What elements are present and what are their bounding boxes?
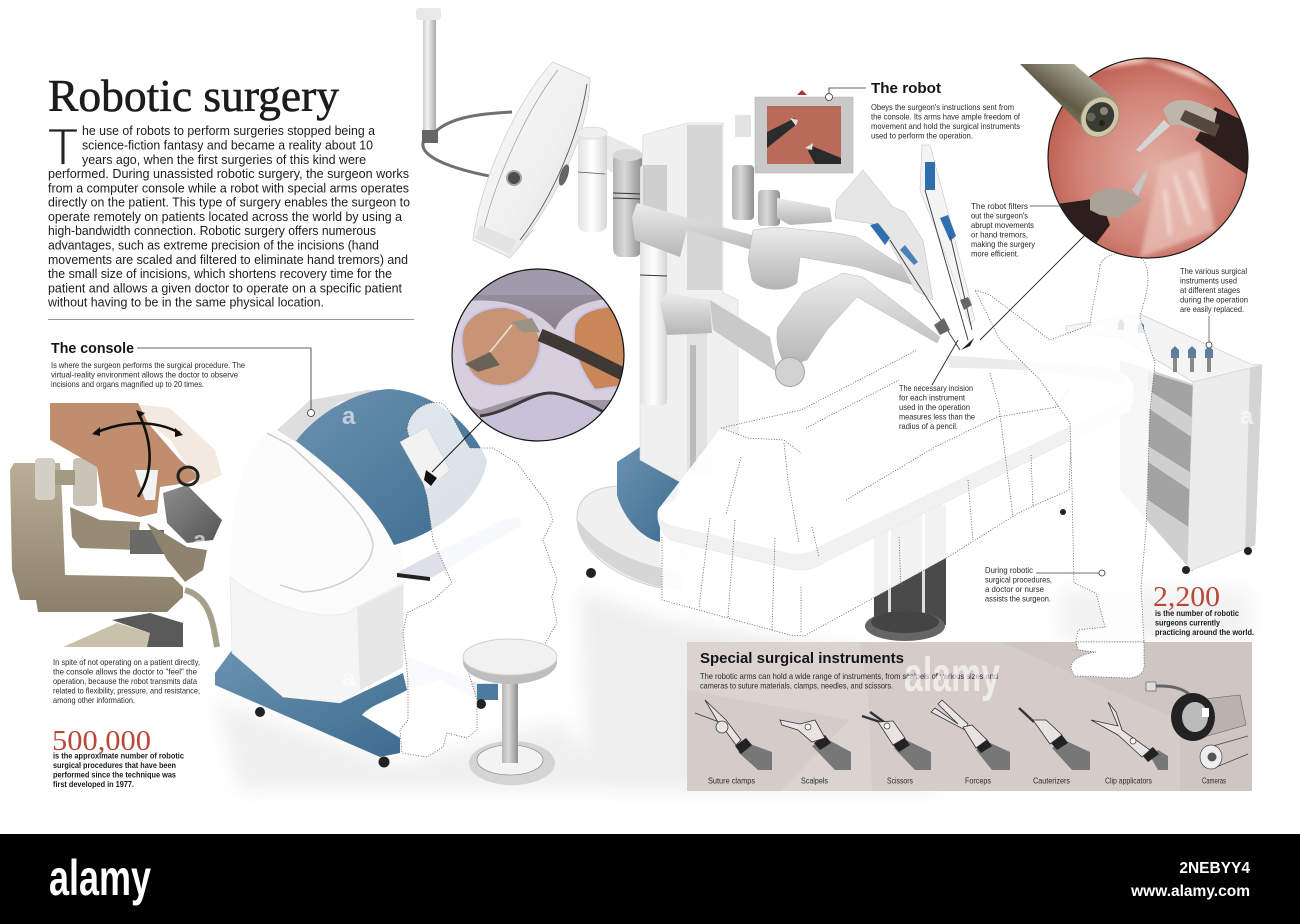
instrument captions: Cauterizers <box>1033 776 1070 786</box>
intro paragraph: movements are scaled and filtered to eliminate hand tremors) and <box>48 253 408 267</box>
coil wraps <box>35 458 55 500</box>
intro paragraph: operate remotely on patients located across the world by using a <box>48 210 402 224</box>
instrument: suture clamps <box>695 700 772 770</box>
tower base <box>577 486 700 590</box>
cart instruments <box>1118 319 1213 358</box>
instrument captions: Scissors <box>887 776 913 786</box>
hand controller <box>10 403 222 647</box>
stat: 2,200 <box>1153 581 1254 637</box>
note: assistant <box>985 565 1105 604</box>
note: tremor filtering: out the surgeon's <box>971 210 1028 220</box>
floor reflections <box>215 590 1250 790</box>
instruments in lens <box>512 318 540 332</box>
instrument: scissors <box>862 712 931 770</box>
watermark <box>193 403 1254 702</box>
note: tremor filtering: or hand tremors, <box>971 230 1028 240</box>
panel description: cameras to suture materials, clamps, needles, and scissors. <box>700 680 893 690</box>
intro paragraph: the small size of incisions, which shortens recovery time for the <box>48 267 392 281</box>
instrument captions: Scalpels <box>801 776 828 786</box>
note: tremor filtering: abrupt movements <box>971 220 1034 230</box>
endoscope tube <box>1020 64 1116 128</box>
note: instruments replaced <box>1180 266 1250 348</box>
footer band <box>0 834 1300 924</box>
panel heading: Special surgical instruments <box>700 650 904 667</box>
stat: 500,000: 500,000 <box>52 725 151 757</box>
leader <box>137 348 311 410</box>
intro text block <box>47 118 414 310</box>
stat: 500,000: is the approximate number of robotic <box>53 750 184 760</box>
grip cylinder <box>163 485 222 543</box>
note: instruments replaced: at different stages <box>1180 285 1240 295</box>
instrument captions: Suture clamps <box>708 776 755 786</box>
controller stand <box>63 623 150 647</box>
cart body <box>1120 360 1193 572</box>
instrument holders <box>920 145 975 325</box>
instrument captions <box>708 776 1226 786</box>
leader <box>829 88 866 93</box>
watermark: a <box>1240 403 1254 430</box>
note: tremor filtering <box>971 201 1062 258</box>
watermark: a <box>1090 524 1104 551</box>
console note: among other information. <box>53 695 135 705</box>
mattress top <box>658 360 1133 554</box>
instrument: forceps <box>931 700 1010 770</box>
console description: virtual-reality environment allows the doctor to observe <box>51 370 238 380</box>
console note: related to flexibility, pressure, and resistance, <box>53 686 200 696</box>
lamp ceiling post <box>416 8 441 132</box>
console eyepiece <box>400 427 450 490</box>
motion arrows <box>95 423 180 433</box>
robot heading <box>826 80 941 100</box>
console blue hood <box>296 389 487 545</box>
watermark: a <box>342 403 356 430</box>
intro paragraph: advantages, such as extreme precision of the incisions (hand <box>48 238 379 252</box>
head-rest shade <box>945 355 1125 385</box>
lower arm <box>660 293 712 335</box>
assistant silhouette <box>975 253 1155 642</box>
stat: 2,200: is the number of robotic <box>1155 608 1239 618</box>
note: incision: measures less than the <box>899 412 975 422</box>
inset: console binocular view <box>432 265 630 472</box>
tower blue collar <box>617 445 685 542</box>
drop cap: T <box>47 118 79 177</box>
leader <box>1036 572 1099 574</box>
operating table <box>658 350 1134 641</box>
instrument: clip applicators <box>1091 702 1168 770</box>
console heading <box>51 340 314 416</box>
lamp connector <box>507 171 521 185</box>
note: instruments replaced: instruments used <box>1180 276 1237 286</box>
note: incision: for each instrument <box>899 392 966 402</box>
assistant foot over panel <box>1071 642 1144 678</box>
note: tremor filtering: making the surgery <box>971 239 1036 249</box>
instrument: cauterizers <box>1019 708 1090 770</box>
controller frame <box>10 463 183 612</box>
instrument: cameras <box>1146 682 1248 769</box>
note: instruments replaced: are easily replaced. <box>1180 304 1244 314</box>
watermark: alamy <box>904 649 1000 702</box>
console base <box>215 650 407 757</box>
cable <box>185 590 217 647</box>
lamp head <box>473 62 590 258</box>
robot tower <box>577 115 975 590</box>
mattress side <box>658 375 1134 570</box>
console <box>215 389 522 768</box>
robot description: the console. Its arms have ample freedom of <box>871 112 1021 122</box>
stat: 500,000: first developed in 1977. <box>53 779 134 789</box>
callout line to incision <box>932 232 1088 385</box>
intro paragraph: performed. During unassisted robotic surgery, the surgeon works <box>48 167 409 181</box>
intro paragraph: without having to be in the same physical location. <box>47 296 324 310</box>
intro paragraph: from a computer console while a robot with special arms operates <box>48 181 409 195</box>
console description: incisions and organs magnified up to 20 times. <box>51 379 204 389</box>
robot description: used to perform the operation. <box>871 130 973 140</box>
patient outline <box>699 350 1070 633</box>
image id: 2NEBYY4 <box>1179 860 1250 877</box>
instrument captions: Cameras <box>1202 776 1226 786</box>
stat: 2,200: 2,200 <box>1153 581 1220 613</box>
left lens <box>462 307 540 386</box>
inset: surgical view <box>1020 56 1252 258</box>
note: assistant: assists the surgeon. <box>985 594 1051 604</box>
note: instruments replaced: The various surgical <box>1180 266 1247 276</box>
stat: 2,200: surgeons currently <box>1155 618 1220 628</box>
console note: the console allows the doctor to "feel" the <box>53 666 197 676</box>
robot heading: The robot <box>871 80 941 97</box>
console white body <box>230 410 405 703</box>
footer logo: alamy <box>49 850 151 906</box>
stat: 500,000: surgical procedures that have been <box>53 760 176 770</box>
lamp arm ring <box>423 112 512 180</box>
robot description: movement and hold the surgical instruments <box>871 121 1020 131</box>
panel description: The robotic arms can hold a wide range of instruments, from scalpels of various sizes and <box>700 671 998 681</box>
intro paragraph: directly on the patient. This type of surgery enables the surgeon to <box>48 196 410 210</box>
instrument cart <box>1060 314 1262 574</box>
tower cylinders <box>592 128 640 190</box>
right lens <box>574 305 630 390</box>
instrument captions: Forceps <box>965 776 991 786</box>
console upper band <box>277 390 387 442</box>
intro paragraph: science-fiction fantasy and became a reality about 10 <box>82 138 373 152</box>
stool <box>463 639 557 785</box>
footer url: www.alamy.com <box>1130 883 1250 900</box>
title: Robotic surgery <box>48 71 340 121</box>
intro paragraph: years ago, when the first surgeries of this kind were <box>82 153 366 167</box>
drape <box>660 380 1130 636</box>
upper arm <box>632 203 752 257</box>
hand ghost <box>125 403 222 485</box>
tissue highlights <box>1100 58 1218 258</box>
note: assistant: surgical procedures, <box>985 574 1052 584</box>
instrument: scalpels <box>780 720 851 770</box>
note: assistant: a doctor or nurse <box>985 584 1044 594</box>
surgical lamp <box>416 8 590 258</box>
instrument captions: Clip applicators <box>1105 776 1152 786</box>
console note: operation, because the robot transmits data <box>53 676 197 686</box>
leader <box>1208 316 1210 342</box>
watermark: a <box>342 665 356 692</box>
watermark: a <box>193 527 207 554</box>
lower instrument <box>1060 199 1110 243</box>
tower column <box>640 123 738 482</box>
intro paragraph: patient and allows a given doctor to operate on a specific patient <box>48 281 402 295</box>
intro paragraph: he use of robots to perform surgeries stopped being a <box>82 124 375 138</box>
robot description: Obeys the surgeon's instructions sent from <box>871 102 1014 112</box>
console rear base <box>407 657 498 700</box>
top bar <box>478 276 598 295</box>
panel: special surgical instruments <box>687 642 1252 791</box>
note: incision: radius of a pencil. <box>899 421 958 431</box>
stat: 500,000: performed since the technique was <box>53 770 176 780</box>
cart top <box>1066 314 1262 382</box>
console heading: The console <box>51 340 134 357</box>
note: incision: used in the operation <box>899 402 970 412</box>
stat: 500,000 <box>52 725 186 789</box>
lower field <box>478 394 604 440</box>
note: tremor filtering: The robot filters <box>971 201 1028 211</box>
robot monitor <box>755 90 853 173</box>
intro paragraph: high-bandwidth connection. Robotic surgery offers numerous <box>48 224 376 238</box>
console front panel edge <box>267 433 373 592</box>
table pedestal <box>874 505 946 625</box>
note: incision: The necessary incision <box>899 383 973 393</box>
console armrest <box>397 517 522 577</box>
stat: 2,200: practicing around the world. <box>1155 627 1254 637</box>
note: assistant: During robotic <box>985 565 1033 575</box>
note: tremor filtering: more efficient. <box>971 248 1019 258</box>
console note: In spite of not operating on a patient directly, <box>53 657 200 667</box>
lamp side socket <box>557 163 571 187</box>
console description: Is where the surgeon performs the surgical procedure. The <box>51 360 245 370</box>
upper instrument <box>1195 107 1248 174</box>
hand <box>50 403 200 517</box>
console surgeon silhouette <box>400 403 557 757</box>
note: instruments replaced: during the operation <box>1180 294 1248 304</box>
glasses frame <box>450 299 630 410</box>
